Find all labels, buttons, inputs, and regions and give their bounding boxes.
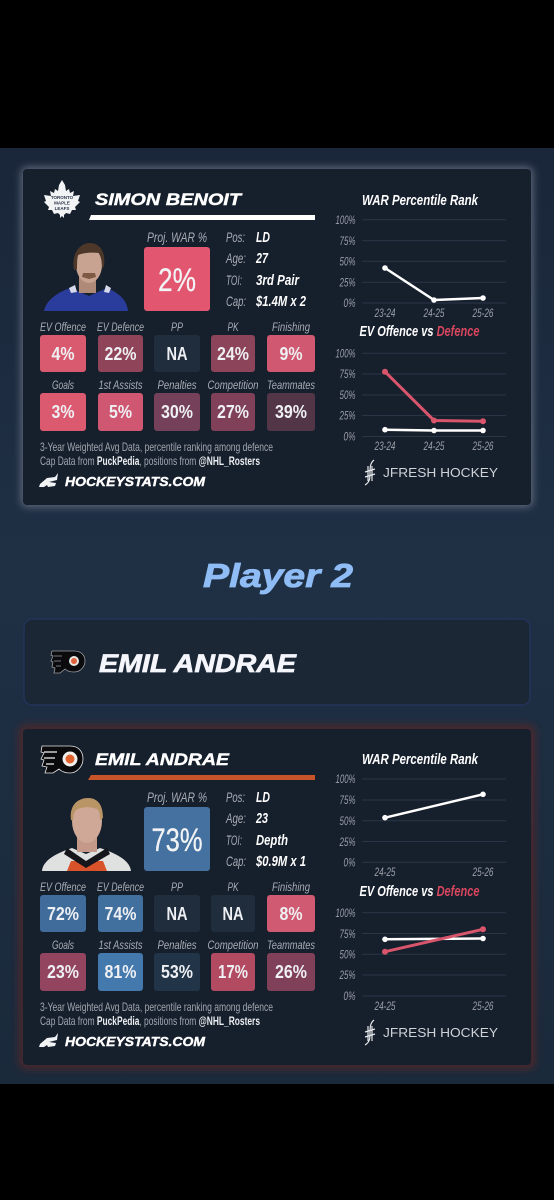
chart: EV offence vs defence: 50% — [340, 388, 356, 402]
proj WAR label: Proj. WAR % — [147, 789, 207, 805]
stat tiles: bottom row — [40, 378, 315, 431]
hockeystats brand: HOCKEYSTATS.COM — [65, 474, 206, 489]
name underline — [89, 215, 315, 220]
chart: WAR percentile rank: 50% — [340, 254, 356, 268]
chart: WAR percentile rank: 75% — [340, 234, 356, 248]
card glow: player 2 — [19, 725, 535, 1069]
chart: WAR percentile rank: 25% — [339, 276, 356, 290]
chart: EV offence vs defence: 100% — [336, 906, 356, 920]
jfresh hockey brand — [365, 460, 498, 485]
chart: EV offence vs defence — [336, 323, 506, 453]
proj WAR box — [144, 807, 210, 871]
chart: WAR percentile rank: 24-25 — [423, 306, 445, 320]
bio details: Age: — [225, 810, 246, 826]
bio details: LD — [256, 790, 270, 806]
stat tiles: bottom row: Penalties — [158, 938, 196, 952]
bio details: $0.9M x 1 — [255, 854, 306, 870]
chart: EV offence vs defence: EV Offence vs Defence — [360, 883, 479, 900]
stat tiles: top row — [40, 320, 315, 372]
chart: EV offence vs defence: 100% — [336, 346, 356, 360]
stat tiles: top row: EV Defence — [97, 320, 144, 334]
chart: WAR percentile rank: 25% — [339, 835, 356, 849]
chart: EV offence vs defence: 0% — [344, 989, 356, 1003]
stat tiles: top row: PK — [228, 320, 239, 334]
stat tiles: top row: 22% — [104, 344, 136, 364]
stat tiles: top row: NA — [166, 904, 188, 924]
chart: EV offence vs defence: 24-25 — [423, 439, 445, 453]
stat tiles: top row: NA — [166, 344, 188, 364]
icon: Maple Leafs logo: LEAFS — [55, 206, 69, 211]
bio details: TOI: — [226, 272, 242, 288]
stat tiles: top row: 9% — [280, 344, 302, 364]
stat tiles: bottom row: 27% — [217, 402, 249, 422]
player photo — [44, 243, 128, 311]
stat tiles: bottom row: Teammates — [267, 378, 315, 392]
footnote — [40, 1000, 273, 1028]
stat tiles: top row: PP — [171, 880, 183, 894]
chart: EV offence vs defence: 75% — [340, 927, 356, 941]
bio details: Cap: — [226, 853, 246, 869]
bio details: $1.4M x 2 — [255, 294, 306, 310]
stat tiles: bottom row: 5% — [109, 402, 132, 422]
chart: WAR percentile rank: WAR Percentile Rank — [362, 751, 478, 768]
chart: WAR percentile rank — [336, 751, 506, 879]
bio details: Pos: — [226, 229, 245, 245]
stat tiles: bottom row: 1st Assists — [98, 938, 142, 952]
stat tiles: bottom row: Teammates — [267, 938, 315, 952]
bio details: 23 — [255, 811, 268, 827]
bio details: 27 — [255, 251, 269, 267]
footnote: Cap Data from PuckPedia, positions from @NHL_Rosters — [40, 454, 260, 468]
chart: EV offence vs defence: EV Offence vs Defence — [360, 323, 479, 340]
chart: WAR percentile rank: WAR Percentile Rank — [362, 192, 478, 209]
chart: EV offence vs defence: 50% — [340, 948, 356, 962]
stat tiles: bottom row: 30% — [161, 402, 193, 422]
player name: EMIL ANDRAE — [99, 650, 298, 678]
bio details: TOI: — [226, 832, 242, 848]
stat tiles: top row: 72% — [47, 904, 79, 924]
stat tiles: top row: Finishing — [272, 880, 310, 894]
chart: EV offence vs defence: 23-24 — [374, 439, 396, 453]
proj WAR label: Proj. WAR % — [147, 229, 207, 245]
chart: EV offence vs defence: 25% — [339, 408, 356, 422]
stat tiles: bottom row — [40, 938, 315, 991]
chart: EV offence vs defence: 25% — [339, 968, 356, 982]
chart: EV offence vs defence: 25-26 — [472, 439, 494, 453]
chart: WAR percentile rank: 100% — [336, 213, 356, 227]
chart: WAR percentile rank — [336, 192, 506, 320]
stat tiles: top row: EV Offence — [40, 880, 86, 894]
bio details: Cap: — [226, 293, 246, 309]
stat tiles: bottom row: 53% — [161, 962, 193, 982]
chart: WAR percentile rank: 75% — [340, 793, 356, 807]
stat tiles: top row: PK — [228, 880, 239, 894]
proj WAR box: 73% — [152, 822, 202, 858]
stat tiles: bottom row: 39% — [275, 402, 307, 422]
chart: EV offence vs defence: 25-26 — [472, 999, 494, 1013]
jfresh hockey brand: JFRESH HOCKEY — [383, 465, 498, 480]
player photo — [42, 798, 131, 871]
stat tiles: bottom row: 81% — [104, 962, 136, 982]
chart: WAR percentile rank: 0% — [344, 296, 356, 310]
stat tiles: bottom row: 3% — [52, 402, 74, 422]
stat tiles: bottom row: 17% — [218, 962, 248, 982]
stat tiles: bottom row: Competition — [208, 938, 259, 952]
chart: EV offence vs defence: 75% — [340, 367, 356, 381]
name underline — [88, 775, 315, 780]
panel: Emil Andrae card — [23, 729, 531, 1065]
stat tiles: top row: PP — [171, 320, 183, 334]
stat tiles: bottom row: 26% — [275, 962, 307, 982]
jfresh hockey brand: JFRESH HOCKEY — [383, 1025, 498, 1040]
stat tiles: top row: EV Defence — [97, 880, 144, 894]
chart: EV offence vs defence: 0% — [344, 430, 356, 444]
stat tiles: top row — [40, 880, 315, 932]
bio details: Age: — [225, 250, 246, 266]
stat tiles: top row: 8% — [280, 904, 302, 924]
panel: Simon Benoit card — [23, 169, 531, 505]
chart: WAR percentile rank: 0% — [344, 856, 356, 870]
stat tiles: top row: NA — [222, 904, 244, 924]
stat tiles: bottom row: Penalties — [158, 378, 196, 392]
stat tiles: bottom row: 1st Assists — [98, 378, 142, 392]
stat tiles: top row: 4% — [52, 344, 74, 364]
icon: Flyers logo small — [51, 651, 85, 673]
bio details — [225, 229, 306, 310]
footnote — [40, 440, 273, 468]
heading: Player 2: Player 2 — [203, 557, 354, 594]
stat tiles: top row: Finishing — [272, 320, 310, 334]
chart: WAR percentile rank: 100% — [336, 772, 356, 786]
footnote: 3-Year Weighted Avg Data, percentile ranking among defence — [40, 1000, 273, 1014]
chart: WAR percentile rank: 25-26 — [472, 865, 494, 879]
bio details: 3rd Pair — [256, 273, 300, 289]
player name: SIMON BENOIT — [95, 190, 243, 209]
jfresh hockey brand — [365, 1020, 498, 1045]
card glow: player 1 — [21, 167, 533, 507]
stat tiles: bottom row: Goals — [52, 938, 74, 952]
stat tiles: bottom row: Goals — [52, 378, 74, 392]
footnote: 3-Year Weighted Avg Data, percentile ranking among defence — [40, 440, 273, 454]
panel: Emil Andrae name bar — [24, 619, 530, 705]
stat tiles: bottom row: Competition — [208, 378, 259, 392]
icon: Maple Leafs logo: MAPLE — [54, 200, 70, 206]
icon: Maple Leafs logo: TORONTO — [51, 195, 74, 200]
chart: WAR percentile rank: 24-25 — [374, 865, 396, 879]
bio details: LD — [256, 230, 270, 246]
bio details: Depth — [256, 833, 288, 849]
proj WAR box — [144, 247, 210, 311]
chart: WAR percentile rank: 25-26 — [472, 306, 494, 320]
stat tiles: top row: EV Offence — [40, 320, 86, 334]
proj WAR box: 2% — [158, 262, 196, 298]
chart: EV offence vs defence: 24-25 — [374, 999, 396, 1013]
stat tiles: top row: 24% — [217, 344, 249, 364]
page background — [0, 148, 554, 1084]
chart: EV offence vs defence — [336, 883, 506, 1013]
bio details: Pos: — [226, 789, 245, 805]
icon: Maple Leafs logo — [44, 180, 80, 218]
chart: WAR percentile rank: 23-24 — [374, 306, 396, 320]
stat tiles: bottom row: 23% — [47, 962, 79, 982]
player name: EMIL ANDRAE — [95, 750, 230, 769]
icon: Flyers logo — [41, 746, 83, 773]
stat tiles: top row: 74% — [104, 904, 136, 924]
bio details — [225, 789, 306, 870]
hockeystats brand: HOCKEYSTATS.COM — [65, 1034, 206, 1049]
footnote: Cap Data from PuckPedia, positions from @NHL_Rosters — [40, 1014, 260, 1028]
chart: WAR percentile rank: 50% — [340, 814, 356, 828]
